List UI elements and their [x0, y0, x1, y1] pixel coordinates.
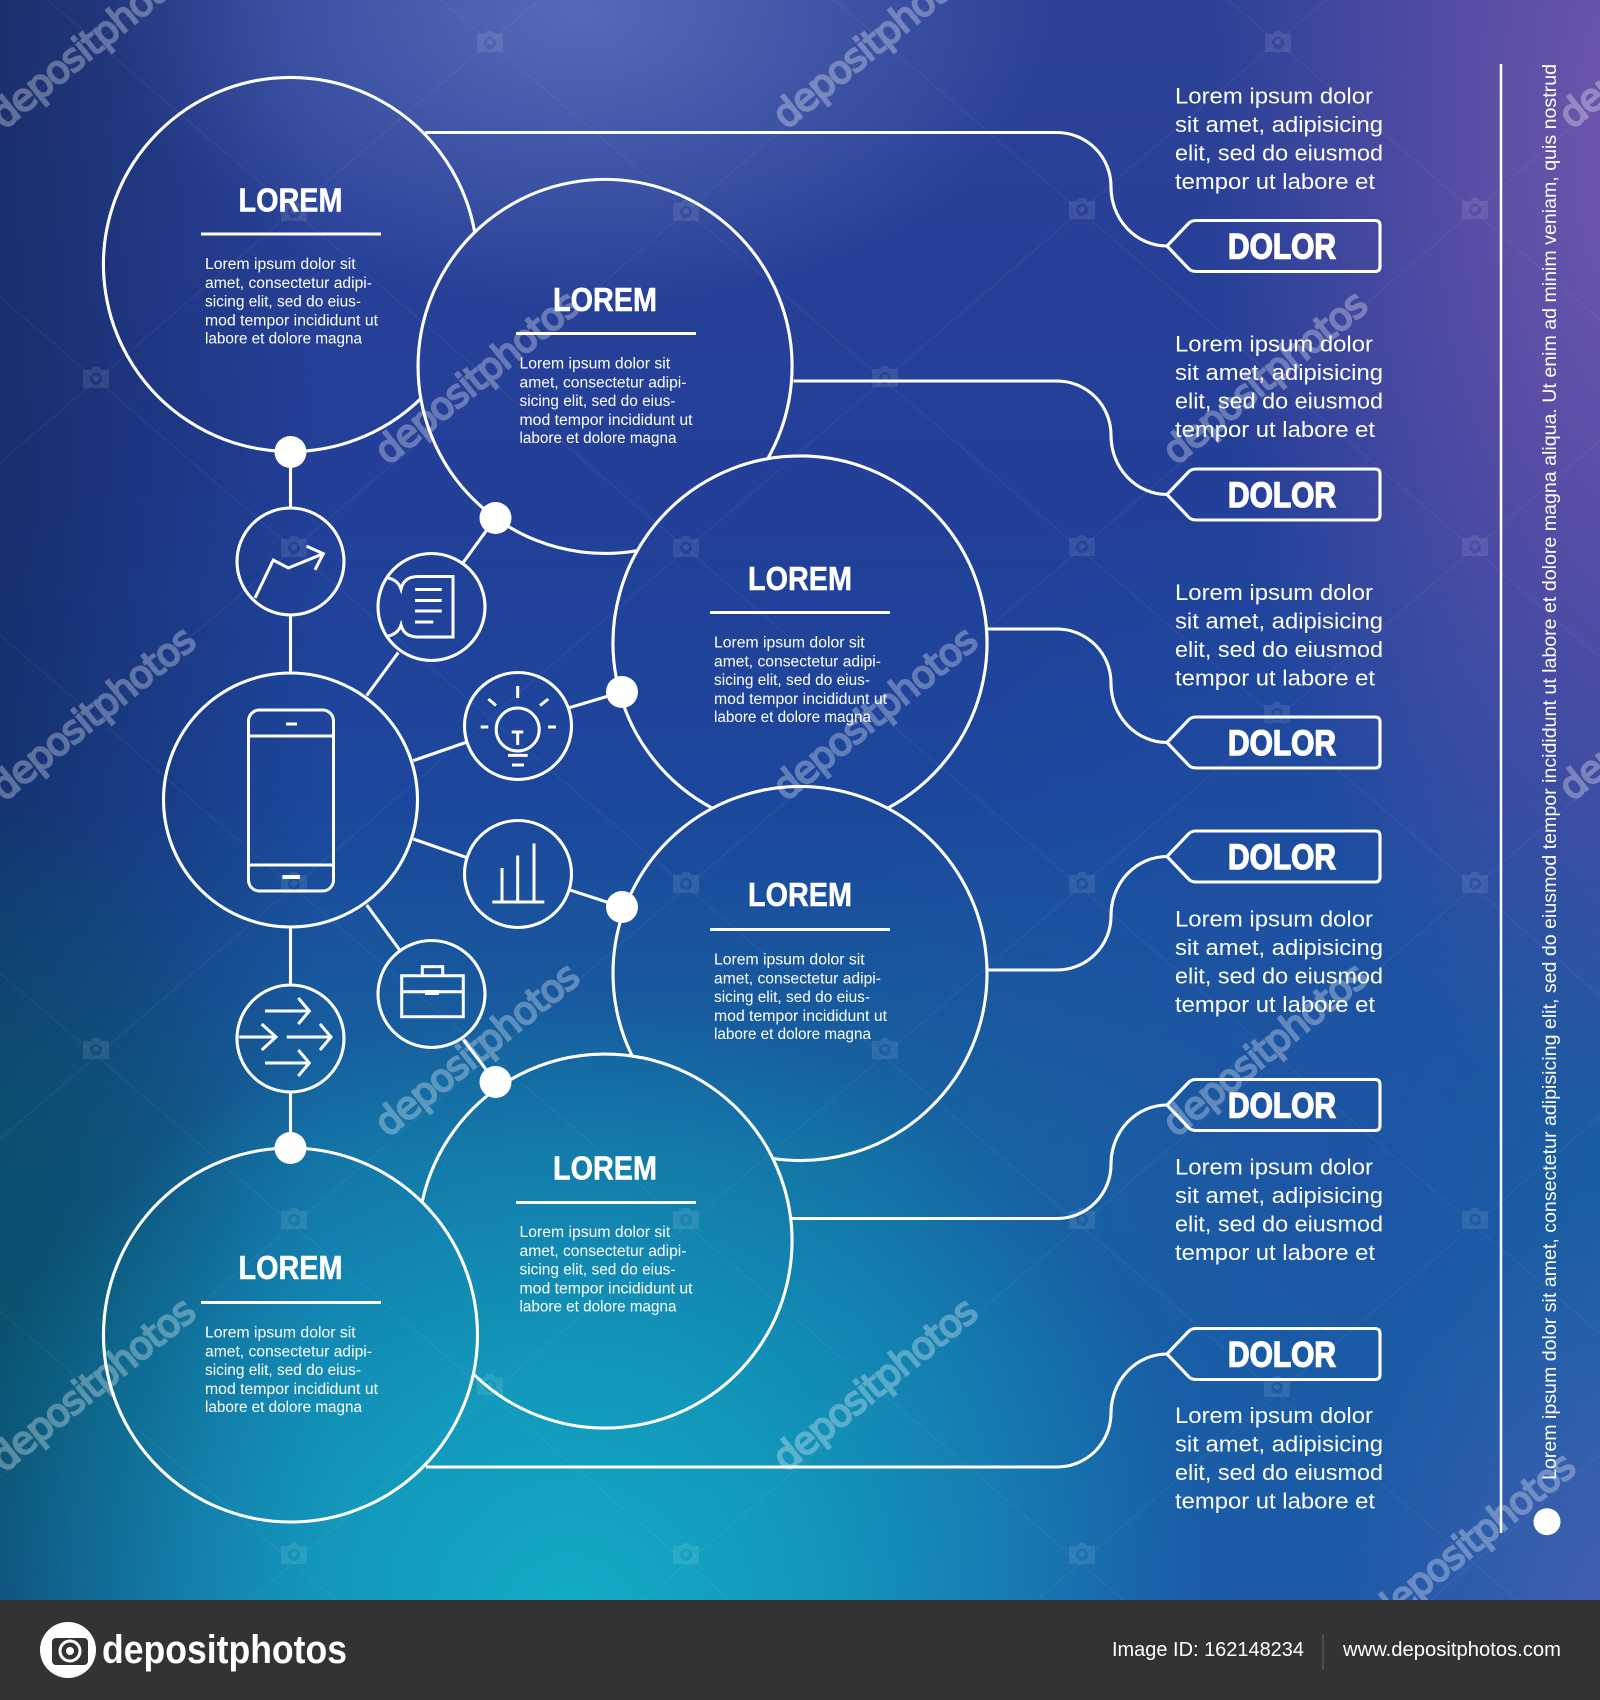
footer url: www.depositphotos.com [1342, 1639, 1561, 1661]
circle 4 [613, 786, 987, 1160]
vertical text: Lorem ipsum dolor sit amet, consectetur adipisicing elit, sed do eiusmod tempor incididunt ut labore et dolore magna aliqua. Ut enim ad minim veniam, quis nostrud [1539, 64, 1561, 1480]
side text block 4: tempor ut labore et [1175, 992, 1376, 1017]
tag 6 [1167, 1328, 1380, 1380]
side text block 4 [1175, 906, 1383, 1017]
side text block 6: Lorem ipsum dolor [1175, 1403, 1374, 1428]
circle 1 text: sicing elit, sed do eius- [205, 294, 361, 310]
footer logo icon [40, 1622, 96, 1678]
circle 2 [418, 179, 792, 553]
icon: light bulb [464, 672, 572, 780]
circle 1 heading: LOREM [238, 182, 342, 218]
circle 3 text: amet, consectetur adipi- [714, 653, 881, 670]
side text block 5: sit amet, adipisicing [1175, 1183, 1383, 1208]
circle 4 text: sicing elit, sed do eius- [714, 989, 870, 1006]
circle 3 text: mod tempor incididunt ut [714, 691, 888, 708]
side text block 1: elit, sed do eiusmod [1175, 140, 1383, 165]
tag 1: DOLOR [1228, 228, 1336, 266]
circle 6 text [205, 1324, 379, 1416]
icon: arrows [237, 985, 344, 1092]
side text block 1 [1175, 83, 1383, 194]
depositphotos watermarks: depositphotos [1154, 953, 1376, 1145]
circle 5 text [520, 1224, 693, 1316]
side text block 2: elit, sed do eiusmod [1175, 389, 1383, 414]
circle 2 text: Lorem ipsum dolor sit [520, 356, 671, 372]
circle 4 heading: LOREM [748, 876, 852, 913]
circle 5 text: labore et dolore magna [520, 1299, 677, 1316]
circle 3 text: labore et dolore magna [714, 709, 871, 726]
icon: growth chart [237, 508, 344, 615]
depositphotos watermarks: depositphotos [366, 953, 588, 1145]
depositphotos watermarks: depositphotos [764, 617, 986, 809]
circle 4 text [714, 952, 888, 1043]
footer logo wordmark: depositphotos [102, 1628, 347, 1672]
side text block 1: tempor ut labore et [1175, 169, 1376, 194]
side text block 5: Lorem ipsum dolor [1175, 1155, 1374, 1180]
circle 4 text: amet, consectetur adipi- [714, 970, 881, 987]
tag 2 [1167, 469, 1380, 520]
side text block 6 [1175, 1403, 1383, 1514]
icon: bar chart [464, 820, 572, 928]
side text block 6: sit amet, adipisicing [1175, 1432, 1383, 1456]
depositphotos watermarks: depositphotos [1154, 281, 1376, 473]
circle 1 text: amet, consectetur adipi- [205, 275, 372, 292]
side text block 1: Lorem ipsum dolor [1175, 83, 1374, 108]
circle 1 [103, 77, 475, 451]
side text block 1: sit amet, adipisicing [1175, 112, 1383, 137]
side text block 6: tempor ut labore et [1175, 1488, 1376, 1514]
circle 4 text: Lorem ipsum dolor sit [714, 952, 865, 968]
side text block 5 [1175, 1155, 1383, 1265]
side text block 2: sit amet, adipisicing [1175, 360, 1383, 385]
side text block 3: Lorem ipsum dolor [1175, 580, 1374, 605]
tag 6: DOLOR [1228, 1336, 1336, 1374]
right vertical rule and dot [1501, 64, 1560, 1535]
footer bar [0, 1600, 1600, 1700]
side text block 3: tempor ut labore et [1175, 666, 1376, 690]
side text block 6: elit, sed do eiusmod [1175, 1460, 1383, 1485]
circle 2 text: amet, consectetur adipi- [520, 374, 686, 391]
side text block 2 [1175, 332, 1383, 442]
circle 1 text: mod tempor incididunt ut [205, 312, 379, 329]
circle 4 text: mod tempor incididunt ut [714, 1008, 888, 1025]
junction dots [274, 436, 638, 1164]
tag 3 [1167, 717, 1380, 768]
icon: briefcase [378, 940, 485, 1048]
circle 4 text: labore et dolore magna [714, 1026, 871, 1043]
circle 1 text [205, 256, 379, 348]
footer image id: Image ID: 162148234 [1112, 1639, 1304, 1661]
side text block 5: elit, sed do eiusmod [1175, 1212, 1383, 1237]
tag 4 [1167, 831, 1380, 882]
circle 1 text: labore et dolore magna [205, 331, 362, 348]
side text block 4: elit, sed do eiusmod [1175, 964, 1383, 988]
tag 1 [1167, 220, 1380, 272]
circle 6 text: amet, consectetur adipi- [205, 1343, 372, 1360]
circle 6 text: sicing elit, sed do eius- [205, 1362, 361, 1379]
watermark camera marks [83, 31, 1488, 1564]
circle 2 heading: LOREM [553, 281, 657, 318]
tag 2: DOLOR [1228, 476, 1336, 515]
circle 2 text [520, 356, 693, 447]
side text block 3: elit, sed do eiusmod [1175, 637, 1383, 662]
circle 6 text: Lorem ipsum dolor sit [205, 1324, 356, 1342]
circle 2 text: sicing elit, sed do eius- [520, 393, 676, 410]
side text block 3: sit amet, adipisicing [1175, 608, 1383, 634]
side text block 5: tempor ut labore et [1175, 1240, 1376, 1265]
circle 3 [613, 456, 987, 808]
circle 6 heading: LOREM [238, 1249, 342, 1286]
circle 5 text: sicing elit, sed do eius- [520, 1262, 676, 1278]
depositphotos watermarks: depositphotos [1362, 1443, 1584, 1635]
tag 3: DOLOR [1228, 724, 1336, 763]
circle 6 text: labore et dolore magna [205, 1399, 362, 1416]
circle 3 heading: LOREM [748, 560, 852, 597]
circle 5 text: Lorem ipsum dolor sit [520, 1224, 671, 1241]
tag 5 [1167, 1080, 1380, 1130]
icon: phone hub [164, 673, 418, 927]
circle 5 [422, 1054, 792, 1428]
circle 2 text: labore et dolore magna [520, 430, 677, 447]
tag 5: DOLOR [1228, 1086, 1336, 1126]
circle 6 [104, 1148, 478, 1522]
circle 5 heading: LOREM [553, 1150, 657, 1186]
circle 1 text: Lorem ipsum dolor sit [205, 256, 356, 273]
tag 4: DOLOR [1228, 838, 1336, 877]
circle 5 text: mod tempor incididunt ut [520, 1280, 693, 1297]
circle 3 text: Lorem ipsum dolor sit [714, 634, 865, 652]
side text block 3 [1175, 580, 1383, 690]
side text block 4: sit amet, adipisicing [1175, 935, 1383, 960]
depositphotos watermarks: depositphotos [366, 281, 588, 473]
circle 5 text: amet, consectetur adipi- [520, 1243, 686, 1260]
side text block 4: Lorem ipsum dolor [1175, 906, 1374, 932]
icon: document [378, 554, 485, 660]
side text block 2: tempor ut labore et [1175, 417, 1376, 442]
depositphotos watermarks: depositphotos [764, 1288, 986, 1480]
circle 2 text: mod tempor incididunt ut [520, 412, 693, 429]
circle 6 text: mod tempor incididunt ut [205, 1381, 379, 1398]
connector lines [290, 132, 1167, 1467]
circle 3 text: sicing elit, sed do eius- [714, 672, 870, 689]
circle 3 text [714, 634, 888, 726]
side text block 2: Lorem ipsum dolor [1175, 332, 1374, 357]
